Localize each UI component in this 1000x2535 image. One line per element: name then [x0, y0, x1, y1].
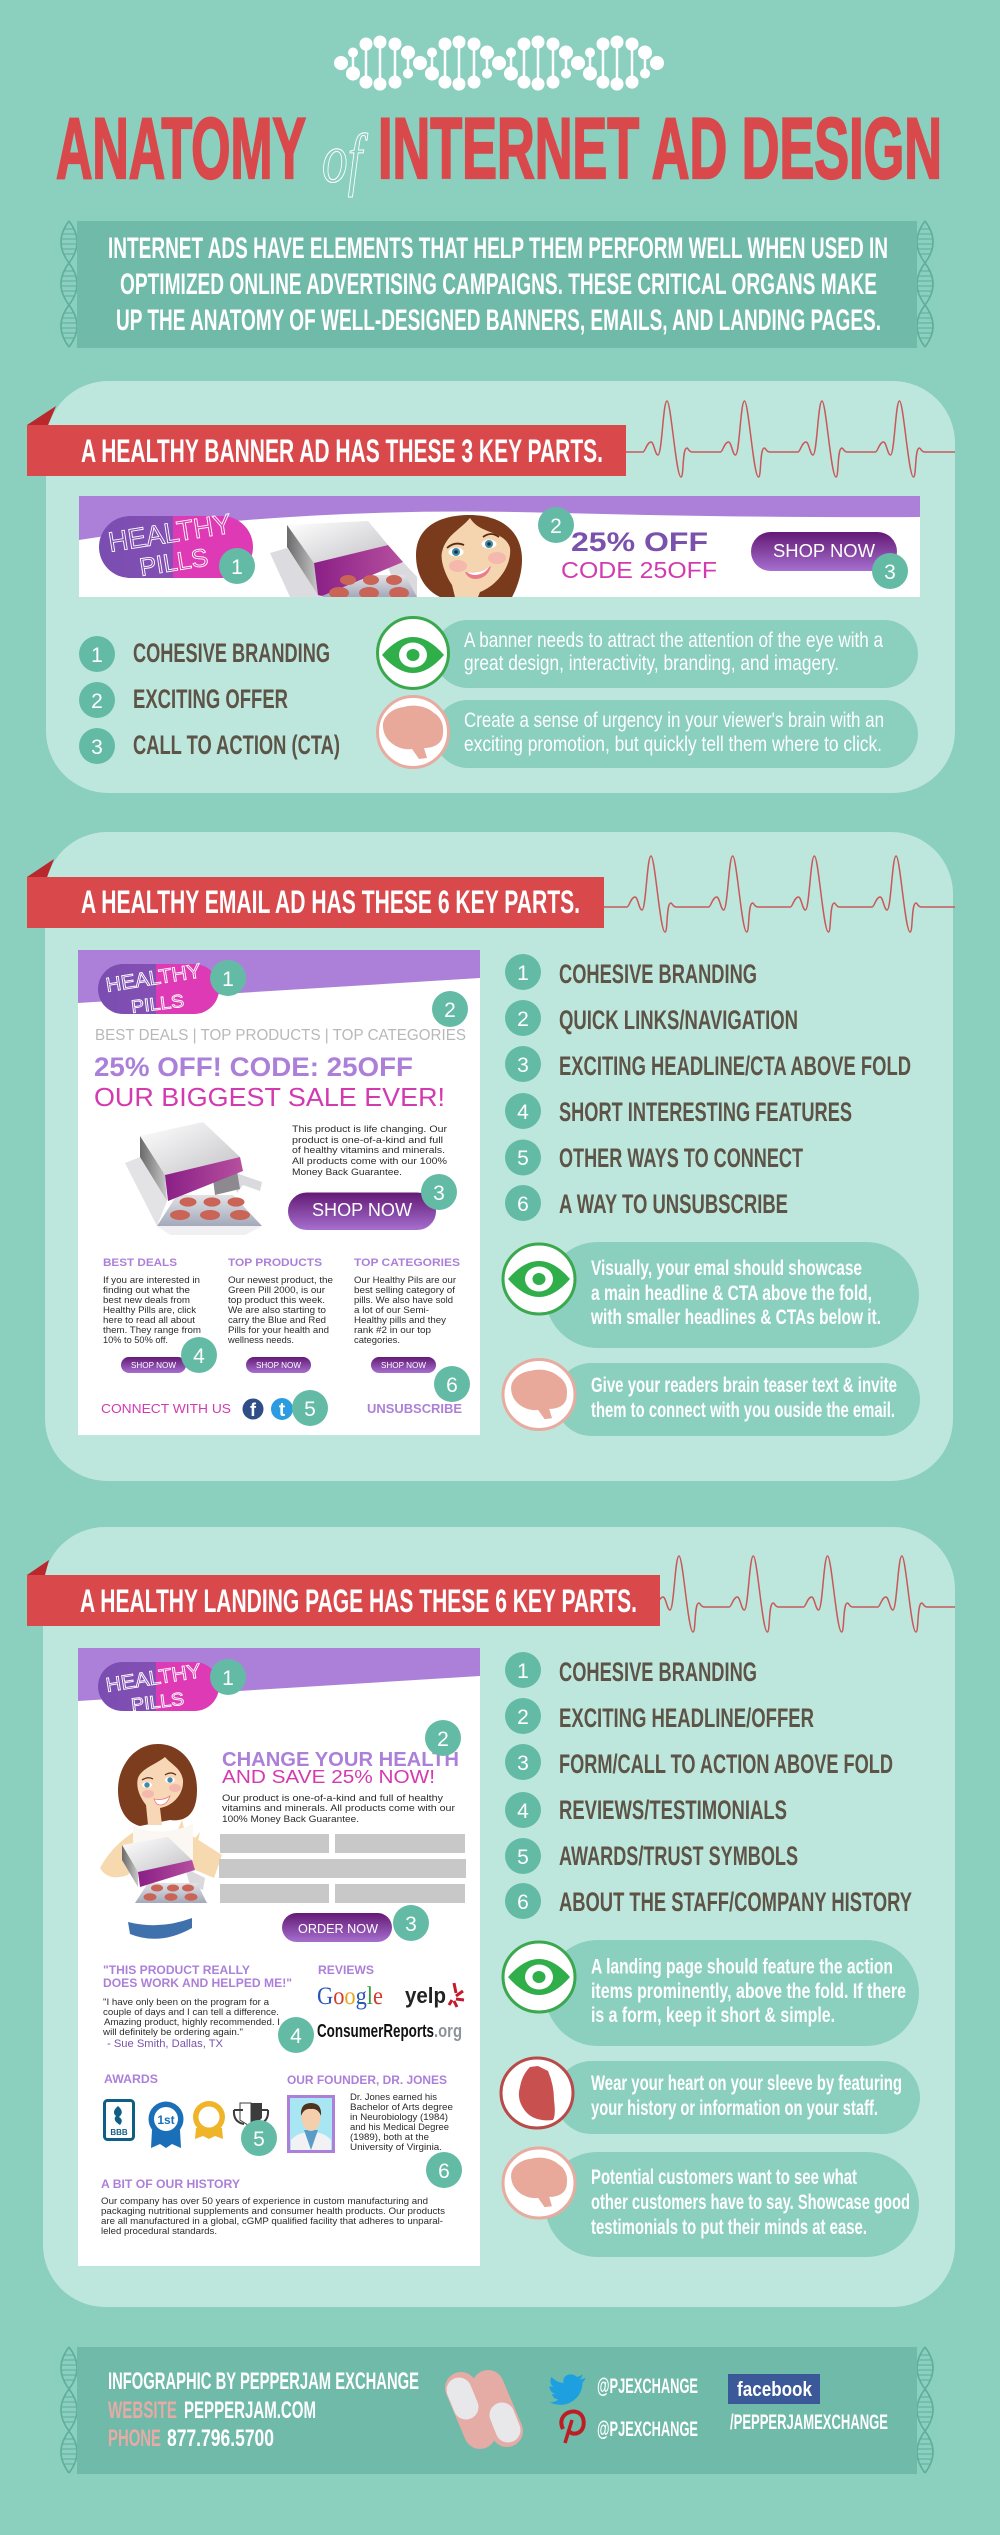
key parts list — [79, 636, 340, 764]
connect row — [101, 1398, 462, 1421]
ribbon fold — [27, 406, 56, 425]
badge 5: 5 — [253, 2128, 265, 2151]
offer text: 25% OFF — [571, 527, 708, 557]
badge 4 — [278, 2017, 314, 2053]
button: shop now: SHOP NOW — [773, 541, 875, 561]
column: top products: SHOP NOW — [256, 1360, 301, 1370]
ribbon heading: A HEALTHY LANDING PAGE HAS THESE 6 KEY PARTS. — [80, 1583, 637, 1619]
badge 3 — [872, 553, 908, 589]
column: best deals: best new deals from — [103, 1295, 190, 1306]
facebook logo: facebook — [737, 2379, 813, 2401]
column: top products: We are also starting to — [228, 1305, 326, 1316]
badge 2: 2 — [437, 1728, 449, 1751]
column: top products: top product this week. — [228, 1295, 325, 1306]
column: top products: Green Pill 2000, is our — [228, 1285, 325, 1296]
key parts list: COHESIVE BRANDING — [133, 638, 330, 668]
badge 5 — [241, 2120, 277, 2156]
key parts list: 4 — [517, 1101, 529, 1124]
key parts list: 1 — [517, 962, 529, 985]
testimonial — [102, 1965, 292, 2050]
reviews: yelp — [405, 1983, 446, 2008]
column: best deals: 10% to 50% off. — [103, 1335, 168, 1346]
callout: brain — [503, 1360, 920, 1436]
column: top products: TOP PRODUCTS — [228, 1257, 322, 1269]
history: A BIT OF OUR HISTORY — [101, 2179, 240, 2191]
key parts list: 2 — [91, 690, 103, 713]
key parts list — [505, 954, 911, 1221]
callout: brain — [378, 696, 918, 768]
column: top categories: rank #2 in our top — [354, 1325, 431, 1336]
badge 4: 4 — [193, 1345, 205, 1368]
key parts list: 2 — [517, 1706, 529, 1729]
testimonial: - Sue Smith, Dallas, TX — [107, 2038, 224, 2050]
key parts list: 6 — [517, 1193, 529, 1216]
panel: email ad — [27, 832, 955, 1481]
column: best deals: here to read all about — [103, 1315, 195, 1326]
button: shop now — [751, 532, 897, 571]
callout: eye: Visually, your emal should showcase — [591, 1257, 862, 1280]
history: Our company has over 50 years of experience in custom manufacturing and — [101, 2196, 428, 2207]
key parts list: 2 — [517, 1008, 529, 1031]
button: order now — [282, 1913, 392, 1942]
badge 2 — [432, 991, 468, 1027]
ribbon fold — [27, 859, 54, 877]
badge 3: 3 — [405, 1913, 417, 1936]
ribbon heading: A HEALTHY EMAIL AD HAS THESE 6 KEY PARTS. — [81, 884, 580, 920]
column: top categories: best selling category of — [354, 1285, 455, 1296]
icon: left DNA strand on intro banner — [61, 221, 77, 347]
history: leled procedural standards. — [101, 2226, 217, 2237]
icon: right DNA strand on footer — [917, 2347, 933, 2473]
product copy — [292, 1124, 448, 1178]
heartbeat line: email — [604, 856, 955, 932]
key parts list: 5 — [517, 1147, 529, 1170]
callout: brain: exciting promotion, but quickly tell them where to click. — [464, 733, 882, 756]
history — [101, 2179, 445, 2237]
key parts list: 3 — [91, 736, 103, 759]
intro banner — [77, 221, 917, 348]
column: best deals: them. They range from — [103, 1325, 201, 1336]
key parts list: OTHER WAYS TO CONNECT — [559, 1143, 803, 1173]
key parts list: QUICK LINKS/NAVIGATION — [559, 1005, 798, 1035]
column: best deals: Healthy Pills are, click — [103, 1305, 196, 1316]
badge 5: 5 — [304, 1398, 316, 1421]
product copy: product is one-of-a-kind and full — [292, 1135, 443, 1146]
logo: Healthy Pills: HEALTHY — [104, 960, 203, 997]
product copy: All products come with our 100% — [292, 1156, 448, 1167]
pill box image — [125, 1122, 262, 1235]
badge 4: 4 — [290, 2025, 302, 2048]
testimonial: "THIS PRODUCT REALLY — [103, 1965, 250, 1977]
badge 1 — [210, 1659, 246, 1695]
icon: heart — [519, 2066, 555, 2120]
badge 4 — [181, 1337, 217, 1373]
key parts list: COHESIVE BRANDING — [559, 1657, 757, 1687]
callout: eye: A landing page should feature the action — [591, 1956, 893, 1978]
logo: Healthy Pills — [98, 960, 219, 1017]
key parts list: 5 — [517, 1846, 529, 1869]
heartbeat line: banner — [626, 401, 955, 477]
logo: Healthy Pills — [99, 508, 253, 582]
column: best deals: If you are interested in — [103, 1275, 200, 1286]
icon: BBB: BBB — [110, 2128, 128, 2137]
badge 2 — [425, 1720, 461, 1756]
callout: eye: a main headline & CTA above the fold, — [591, 1282, 872, 1305]
column: best deals — [103, 1257, 201, 1373]
icon: BBB — [104, 2100, 134, 2140]
navigation: BEST DEALS | TOP PRODUCTS | TOP CATEGORIES — [95, 1027, 466, 1044]
column: top categories: categories. — [354, 1335, 400, 1346]
title — [56, 101, 942, 198]
callout: brain: testimonials to put their minds at ease. — [591, 2216, 867, 2239]
offer text — [561, 527, 717, 583]
icon: first place ribbon — [148, 2102, 184, 2148]
connect row: f — [250, 1400, 257, 1420]
title: of — [322, 121, 368, 198]
key parts list: 1 — [91, 644, 103, 667]
key parts list: 3 — [517, 1054, 529, 1077]
badge 3: 3 — [884, 561, 896, 584]
key parts list: COHESIVE BRANDING — [559, 959, 757, 989]
badge 6 — [434, 1366, 470, 1402]
testimonial: Amazing product, highly recommended. I — [104, 2017, 280, 2028]
column: top products: Our newest product, the — [228, 1275, 333, 1286]
connect row: t — [279, 1400, 286, 1421]
credits: INFOGRAPHIC BY PEPPERJAM EXCHANGE — [108, 2368, 419, 2395]
awards: AWARDS — [104, 2074, 158, 2086]
key parts list: CALL TO ACTION (CTA) — [133, 730, 340, 760]
history: packaging nutritional supplements and consumer health products. Our products — [101, 2206, 445, 2217]
headline — [94, 1052, 445, 1112]
badge 5 — [292, 1390, 328, 1426]
column: best deals: BEST DEALS — [103, 1257, 177, 1269]
button: shop now: SHOP NOW — [312, 1200, 412, 1220]
callout: brain: Create a sense of urgency in your viewer's brain with an — [464, 709, 884, 732]
badge 1: 1 — [222, 1667, 234, 1690]
button: shop now — [288, 1192, 436, 1230]
panel: banner ad — [27, 381, 955, 793]
pinterest handle: @PJEXCHANGE — [597, 2418, 698, 2441]
offer copy — [222, 1793, 455, 1825]
reviews — [317, 1965, 464, 2041]
callout: eye: is a form, keep it short & simple. — [591, 2004, 835, 2027]
testimonial: "I have only been on the program for a — [103, 1997, 270, 2008]
column: top categories: Our Healthy Pils are our — [354, 1275, 456, 1286]
awards — [104, 2074, 268, 2148]
badge 3 — [393, 1905, 429, 1941]
testimonial: couple of days and I can tell a difference. — [103, 2007, 279, 2018]
column: top products — [227, 1257, 333, 1373]
column: top products: carry the Blue and Red — [228, 1315, 326, 1326]
ribbon heading — [27, 877, 604, 928]
offer copy: Our product is one-of-a-kind and full of healthy — [222, 1793, 443, 1804]
connect row: UNSUBSCRIBE — [367, 1401, 462, 1416]
logo: Healthy Pills: PILLS — [130, 991, 185, 1017]
footer banner — [77, 2347, 917, 2474]
callout: heart: your history or information on your staff. — [591, 2097, 878, 2120]
column: best deals: SHOP NOW — [131, 1360, 176, 1370]
purple header curve — [79, 496, 920, 540]
badge 1: 1 — [231, 556, 243, 579]
icon: right DNA strand on intro banner — [917, 221, 933, 347]
key parts list: EXCITING OFFER — [133, 684, 288, 714]
pill box image — [270, 521, 417, 599]
badge 2: 2 — [550, 515, 562, 538]
ribbon fold — [27, 1560, 49, 1575]
reviews: Google — [317, 1983, 383, 2010]
credits — [108, 2368, 419, 2452]
key parts list: A WAY TO UNSUBSCRIBE — [559, 1189, 788, 1219]
product copy: of healthy vitamins and minerals. — [292, 1145, 445, 1156]
testimonial: DOES WORK AND HELPED ME!" — [103, 1978, 292, 1990]
reviews: .org — [434, 2021, 462, 2041]
callout: brain: Potential customers want to see what — [591, 2166, 857, 2189]
icon: shield — [234, 2103, 268, 2128]
column: top categories: TOP CATEGORIES — [354, 1257, 460, 1269]
headline: CHANGE YOUR HEALTH — [222, 1749, 459, 1771]
ribbon heading — [27, 425, 626, 476]
landing page example — [78, 1648, 480, 2266]
connect row: CONNECT WITH US — [101, 1401, 231, 1416]
headline — [222, 1749, 459, 1787]
heartbeat line: landing page — [655, 1556, 955, 1632]
column: top categories: Healthy pills and they — [354, 1315, 446, 1326]
founder: Dr. Jones earned his — [350, 2092, 437, 2103]
key parts list — [505, 1652, 912, 1919]
offer copy: vitamins and minerals. All products come with our — [222, 1803, 455, 1814]
logo: Healthy Pills: PILLS — [130, 1689, 185, 1715]
title: ANATOMY — [56, 101, 306, 197]
callout: eye — [503, 1940, 919, 2046]
callout: eye: great design, interactivity, branding, and imagery. — [464, 652, 839, 675]
founder: and his Medical Degree — [350, 2122, 449, 2133]
logo: Healthy Pills — [98, 1660, 219, 1715]
panel: landing page — [27, 1527, 955, 2307]
key parts list: SHORT INTERESTING FEATURES — [559, 1097, 852, 1127]
key parts list: REVIEWS/TESTIMONIALS — [559, 1795, 787, 1825]
headline: AND SAVE 25% NOW! — [222, 1767, 435, 1787]
offer copy: 100% Money Back Guarantee. — [222, 1814, 359, 1825]
product copy: Money Back Guarantee. — [292, 1167, 402, 1178]
woman — [416, 515, 522, 597]
callout: brain — [503, 2148, 919, 2257]
founder: University of Virginia. — [350, 2142, 442, 2153]
logo: Healthy Pills: HEALTHY — [104, 1660, 203, 1697]
icon: gold ribbon — [193, 2101, 225, 2139]
callout: eye — [503, 1242, 919, 1348]
column: top categories: SHOP NOW — [381, 1360, 426, 1370]
facebook handle: /PEPPERJAMEXCHANGE — [730, 2411, 888, 2434]
logo: Healthy Pills: HEALTHY — [106, 508, 234, 558]
facebook logo — [728, 2374, 820, 2404]
badge 1: 1 — [222, 968, 234, 991]
column: best deals: finding out what the — [103, 1285, 190, 1296]
credits: PEPPERJAM.COM — [184, 2397, 316, 2424]
testimonial: will definitely be ordering again." — [102, 2027, 243, 2038]
badge 2 — [538, 507, 574, 543]
icon: capsule — [459, 2386, 508, 2433]
badge 6: 6 — [446, 1374, 458, 1397]
badge 2: 2 — [444, 999, 456, 1022]
woman holding pill box — [100, 1744, 222, 1939]
credits: 877.796.5700 — [167, 2425, 274, 2452]
icon: twitter — [550, 2374, 586, 2405]
column: top products: wellness needs. — [227, 1335, 294, 1346]
icon: pinterest — [561, 2412, 584, 2443]
key parts list: EXCITING HEADLINE/OFFER — [559, 1703, 814, 1733]
ribbon heading — [27, 1575, 660, 1626]
icon: left DNA strand on footer — [61, 2347, 77, 2473]
founder: Bachelor of Arts degree — [350, 2102, 453, 2113]
ribbon heading: A HEALTHY BANNER AD HAS THESE 3 KEY PARTS. — [81, 433, 603, 469]
badge 1 — [219, 548, 255, 584]
badge 3 — [421, 1174, 457, 1210]
form fields — [219, 1834, 466, 1903]
column: top products: Pills for your health and — [228, 1325, 329, 1336]
credits: WEBSITE — [108, 2397, 177, 2424]
key parts list: 6 — [517, 1891, 529, 1914]
badge 3: 3 — [433, 1182, 445, 1205]
key parts list: 1 — [517, 1660, 529, 1683]
icon: doctor portrait — [288, 2096, 334, 2152]
column: top categories: pills. We also have sold — [354, 1295, 453, 1306]
founder: OUR FOUNDER, DR. JONES — [287, 2075, 447, 2087]
column: top categories — [354, 1257, 460, 1373]
offer text: CODE 25OFF — [561, 557, 717, 583]
badge 1 — [210, 960, 246, 996]
logo: Healthy Pills: PILLS — [138, 543, 210, 582]
callout: eye — [378, 618, 918, 688]
headline: 25% OFF! CODE: 25OFF — [94, 1052, 413, 1082]
twitter handle: @PJEXCHANGE — [597, 2375, 698, 2398]
key parts list: 3 — [517, 1752, 529, 1775]
icon: first place ribbon: 1st — [157, 2113, 175, 2127]
column: top categories: a lot of our Semi- — [354, 1305, 429, 1316]
founder — [287, 2075, 453, 2153]
reviews: REVIEWS — [318, 1965, 374, 1977]
key parts list: AWARDS/TRUST SYMBOLS — [559, 1841, 798, 1871]
email ad example — [78, 950, 480, 1435]
headline: OUR BIGGEST SALE EVER! — [94, 1082, 445, 1112]
icon: white DNA strand — [341, 42, 657, 84]
founder: (1989), both at the — [350, 2132, 429, 2143]
callout: eye: A banner needs to attract the attention of the eye with a — [464, 629, 883, 652]
credits: PHONE — [108, 2425, 161, 2452]
button: order now: ORDER NOW — [298, 1921, 379, 1936]
banner ad example — [79, 496, 920, 599]
callout: eye: items prominently, above the fold. If there — [591, 1980, 906, 2003]
badge 6: 6 — [438, 2160, 450, 2183]
history: are all manufactured in a global, cGMP qualified facility that adheres to unparal- — [101, 2216, 443, 2227]
key parts list: 4 — [517, 1800, 529, 1823]
callout: eye: with smaller headlines & CTAs below it. — [590, 1306, 881, 1329]
product copy: This product is life changing. Our — [292, 1124, 447, 1135]
badge 6 — [426, 2152, 462, 2188]
founder: in Neurobiology (1984) — [350, 2112, 448, 2123]
reviews: ConsumerReports — [317, 2021, 434, 2041]
callout: heart — [501, 2058, 920, 2134]
